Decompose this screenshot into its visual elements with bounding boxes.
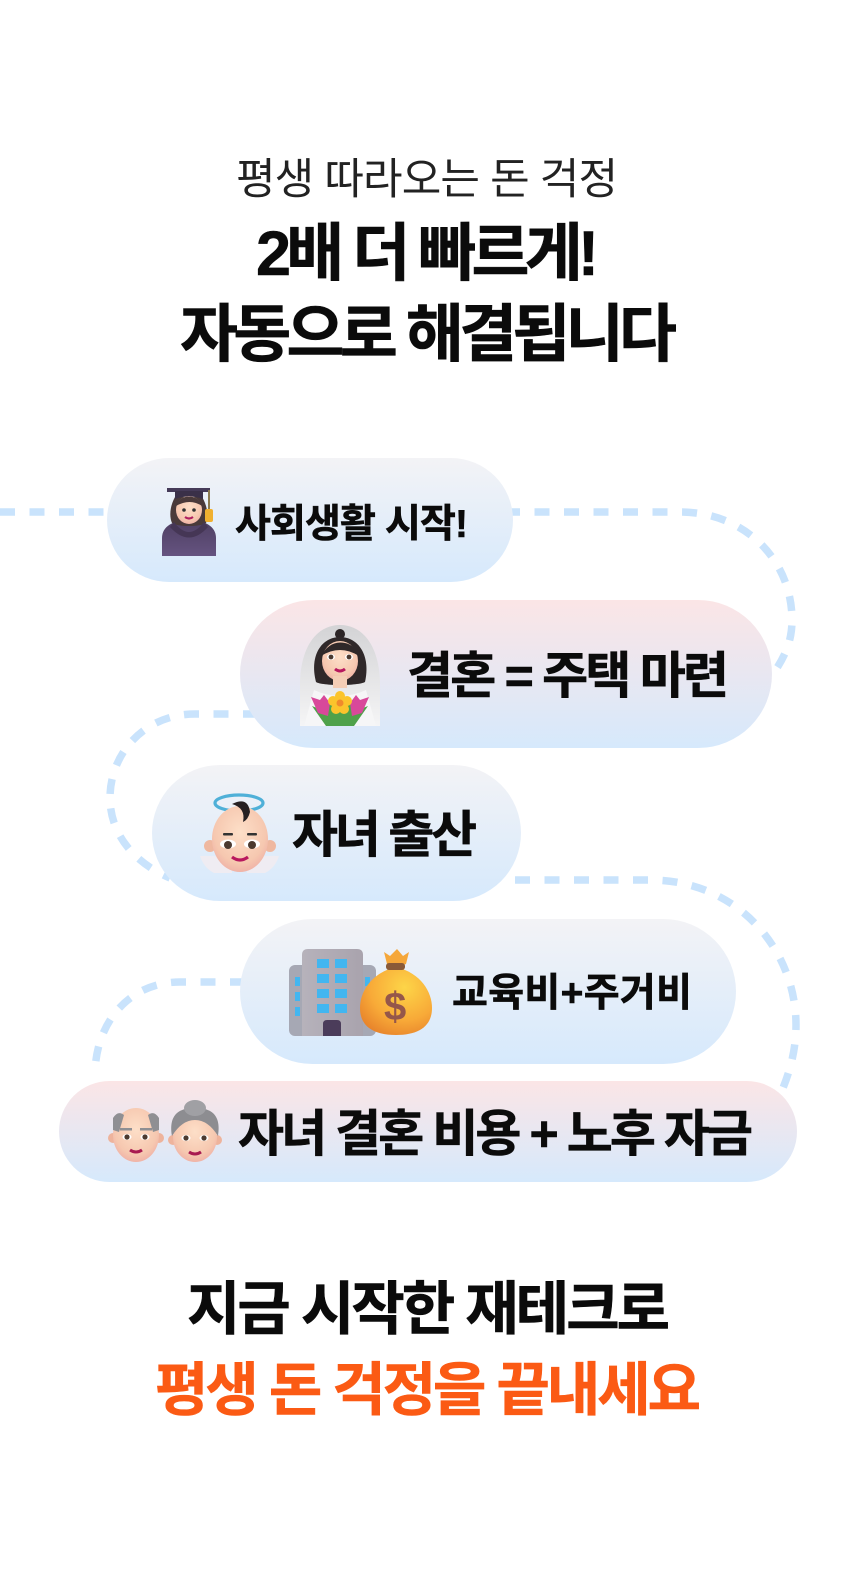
label: 교육비+주거비 xyxy=(452,972,692,1015)
icon: grandmother xyxy=(168,1100,222,1162)
label: 자녀 출산 xyxy=(292,807,477,863)
icon: office building xyxy=(289,949,376,1036)
closing message: 평생 돈 걱정을 끝내세요 xyxy=(155,1358,701,1423)
label: 결혼 = 주택 마련 xyxy=(407,648,729,704)
closing message xyxy=(155,1277,701,1423)
icon: baby angel xyxy=(200,795,279,873)
heading: subtitle: 평생 따라오는 돈 걱정 xyxy=(236,156,618,204)
heading: main title xyxy=(180,219,677,370)
closing message: 지금 시작한 재테크로 xyxy=(187,1277,670,1342)
icon: money bag xyxy=(360,949,432,1035)
icon: bride xyxy=(300,625,380,726)
label: 사회생활 시작! xyxy=(235,503,468,546)
heading: main title: 자동으로 해결됩니다 xyxy=(180,300,677,370)
dashed life path connecting the stages xyxy=(0,512,796,1088)
panel: 자녀 출산 xyxy=(152,765,521,901)
panel: 사회생활 시작 xyxy=(107,458,513,582)
icon: grandfather xyxy=(108,1108,164,1162)
panel: 자녀 결혼 비용 + 노후 자금 xyxy=(59,1081,797,1182)
panel: 결혼 = 주택 마련 xyxy=(240,600,772,748)
icon: graduate xyxy=(162,488,216,556)
label: 자녀 결혼 비용 + 노후 자금 xyxy=(238,1106,753,1162)
heading: main title: 2배 더 빠르게! xyxy=(256,219,599,289)
icon: money bag: $ xyxy=(384,985,406,1029)
panel: 교육비+주거비 xyxy=(240,919,736,1064)
